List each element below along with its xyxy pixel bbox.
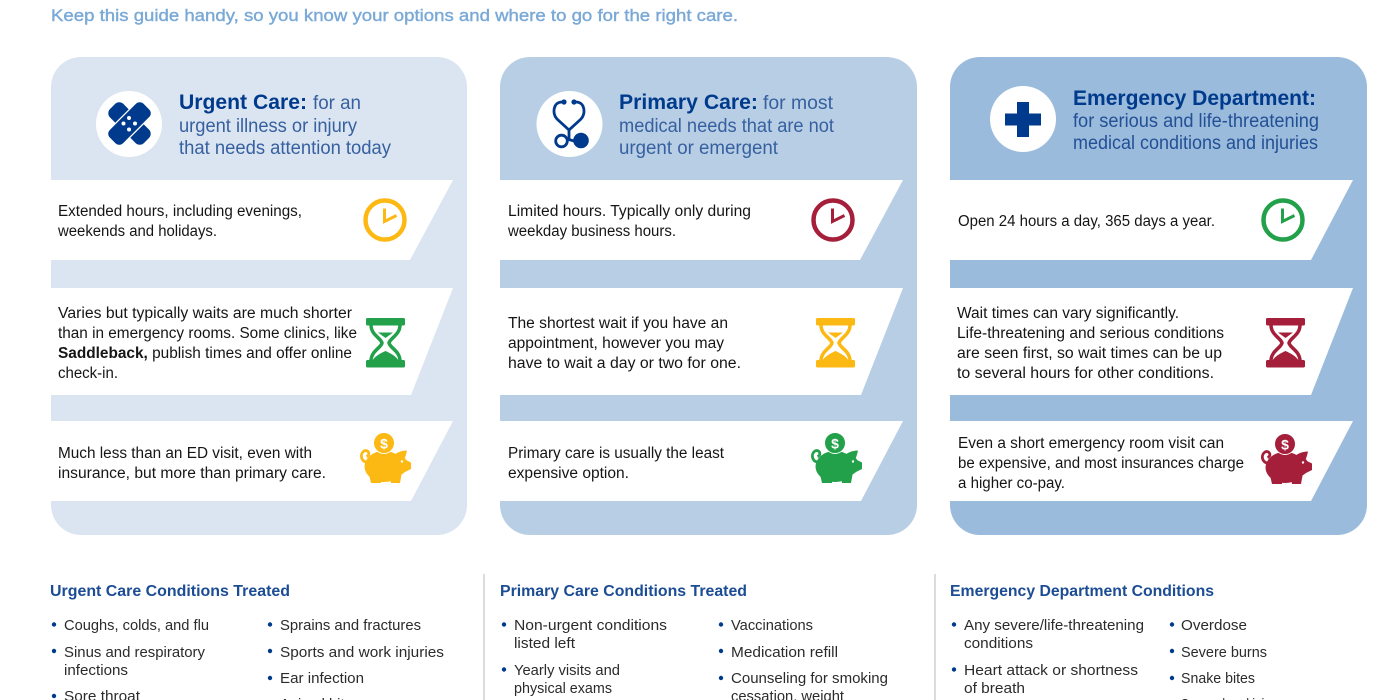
icon: red piggy bank [1262,434,1312,484]
icon: green clock [1264,200,1302,240]
heading: urgent care: Urgent Care: [179,91,307,114]
row: urgent care hours: Extended hours, including evenings, [58,203,302,220]
panel: primary care [500,57,917,535]
row: emergency cost: Even a short emergency room visit can [958,435,1224,452]
list: emergency department conditions: Severe burns [1181,644,1267,661]
list: emergency department conditions: Any severe/life-threatening [964,617,1144,634]
list: emergency department conditions: of breath [964,680,1025,697]
icon: green hourglass [366,318,405,368]
list: primary care conditions: Primary Care Conditions Treated [500,583,747,600]
row: primary care hours: Limited hours. Typically only during [508,203,751,220]
icon: bandage [96,91,162,157]
list: urgent care conditions: Coughs, colds, and flu [64,617,209,634]
row: urgent care hours: weekends and holidays. [57,223,217,240]
list: emergency department conditions: conditions [964,635,1033,652]
row: urgent care hours [51,180,453,260]
row: urgent care cost [51,421,453,501]
row: emergency wait: Life-threatening and serious conditions [957,325,1224,342]
list: urgent care conditions: Sprains and fractures [280,617,421,634]
list: primary care conditions: Vaccinations [731,617,813,634]
row: primary care cost: Primary care is usually the least [508,445,725,462]
list: emergency department conditions: Snake bites [1181,670,1255,687]
row: emergency wait: are seen first, so wait times can be up [957,345,1222,362]
list: primary care conditions [500,583,888,700]
heading: primary care: Primary Care: [619,91,758,114]
row: emergency cost [950,421,1353,501]
list: primary care conditions: Yearly visits and [514,662,620,679]
row: emergency hours: Open 24 hours a day, 365 days a year. [958,213,1215,230]
icon: stethoscope [536,91,602,157]
icon: red clock [814,200,852,240]
list: emergency department conditions: Heart attack or shortness [964,662,1138,679]
list: urgent care conditions: Sports and work injuries [280,644,444,661]
heading: primary care: medical needs that are not [619,116,835,137]
heading: emergency department: Emergency Department: [1073,87,1316,110]
list: primary care conditions: Medication refill [731,644,838,661]
row: primary care wait [500,288,903,395]
row: primary care cost: expensive option. [508,465,629,482]
icon: yellow clock [366,200,404,240]
list: primary care conditions: listed left [514,635,576,652]
row: urgent care wait: Saddleback, publish times and offer online [58,345,352,362]
list: emergency department conditions: Emergency Department Conditions [950,583,1214,600]
row: urgent care cost: Much less than an ED visit, even with [58,445,312,462]
list: urgent care conditions [50,583,444,700]
row: primary care wait: The shortest wait if you have an [508,315,728,332]
list: primary care conditions: physical exams [514,680,612,697]
list: primary care conditions: Counseling for smoking [731,670,888,687]
heading: urgent care [179,91,391,159]
panel: urgent care [51,57,467,535]
heading: urgent care: that needs attention today [179,138,391,159]
row: urgent care wait: than in emergency rooms. Some clinics, like [58,325,357,342]
row: urgent care cost: insurance, but more than primary care. [58,465,326,482]
row: primary care cost [500,421,903,501]
row: urgent care wait: Varies but typically waits are much shorter [58,305,352,322]
row: emergency cost: be expensive, and most insurances charge [958,455,1244,472]
row: primary care wait: appointment, however you may [508,335,724,352]
list: emergency department conditions [950,583,1281,700]
heading: primary care: urgent or emergent [619,138,779,159]
panel: emergency department [950,57,1367,535]
row: emergency wait [950,288,1353,395]
list: urgent care conditions: Sinus and respiratory [64,644,205,661]
intro sentence: Keep this guide handy, so you know your options and where to go for the right care. [51,6,738,25]
heading: emergency department [1073,87,1319,154]
row: emergency wait: Wait times can vary significantly. [957,305,1179,322]
row: primary care wait: have to wait a day or two for one. [508,355,741,372]
icon: medical cross [990,86,1056,152]
row: primary care hours: weekday business hours. [507,223,676,240]
heading: emergency department: for serious and life-threatening [1073,111,1319,132]
heading: primary care: for most [763,93,834,114]
icon: yellow hourglass [816,318,855,368]
list: urgent care conditions: Urgent Care Conditions Treated [50,583,290,600]
list: urgent care conditions: Ear infection [280,670,364,687]
row: urgent care wait [51,288,453,395]
heading: primary care [619,91,835,159]
icon: yellow piggy bank [361,432,411,483]
heading: urgent care: urgent illness or injury [179,116,357,137]
list: emergency department conditions: Overdose [1181,617,1247,634]
row: emergency hours [950,180,1353,260]
row: emergency wait: to several hours for other conditions. [957,365,1214,382]
icon: red hourglass [1266,318,1305,368]
icon: green piggy bank [812,432,862,483]
row: emergency cost: a higher co-pay. [958,475,1065,492]
row: urgent care wait: check-in. [58,365,118,382]
heading: urgent care: for an [313,93,361,114]
list: primary care conditions: Non-urgent conditions [514,617,667,634]
list: urgent care conditions: infections [64,662,128,679]
row: primary care hours [500,180,903,260]
heading: emergency department: medical conditions and injuries [1073,133,1318,154]
